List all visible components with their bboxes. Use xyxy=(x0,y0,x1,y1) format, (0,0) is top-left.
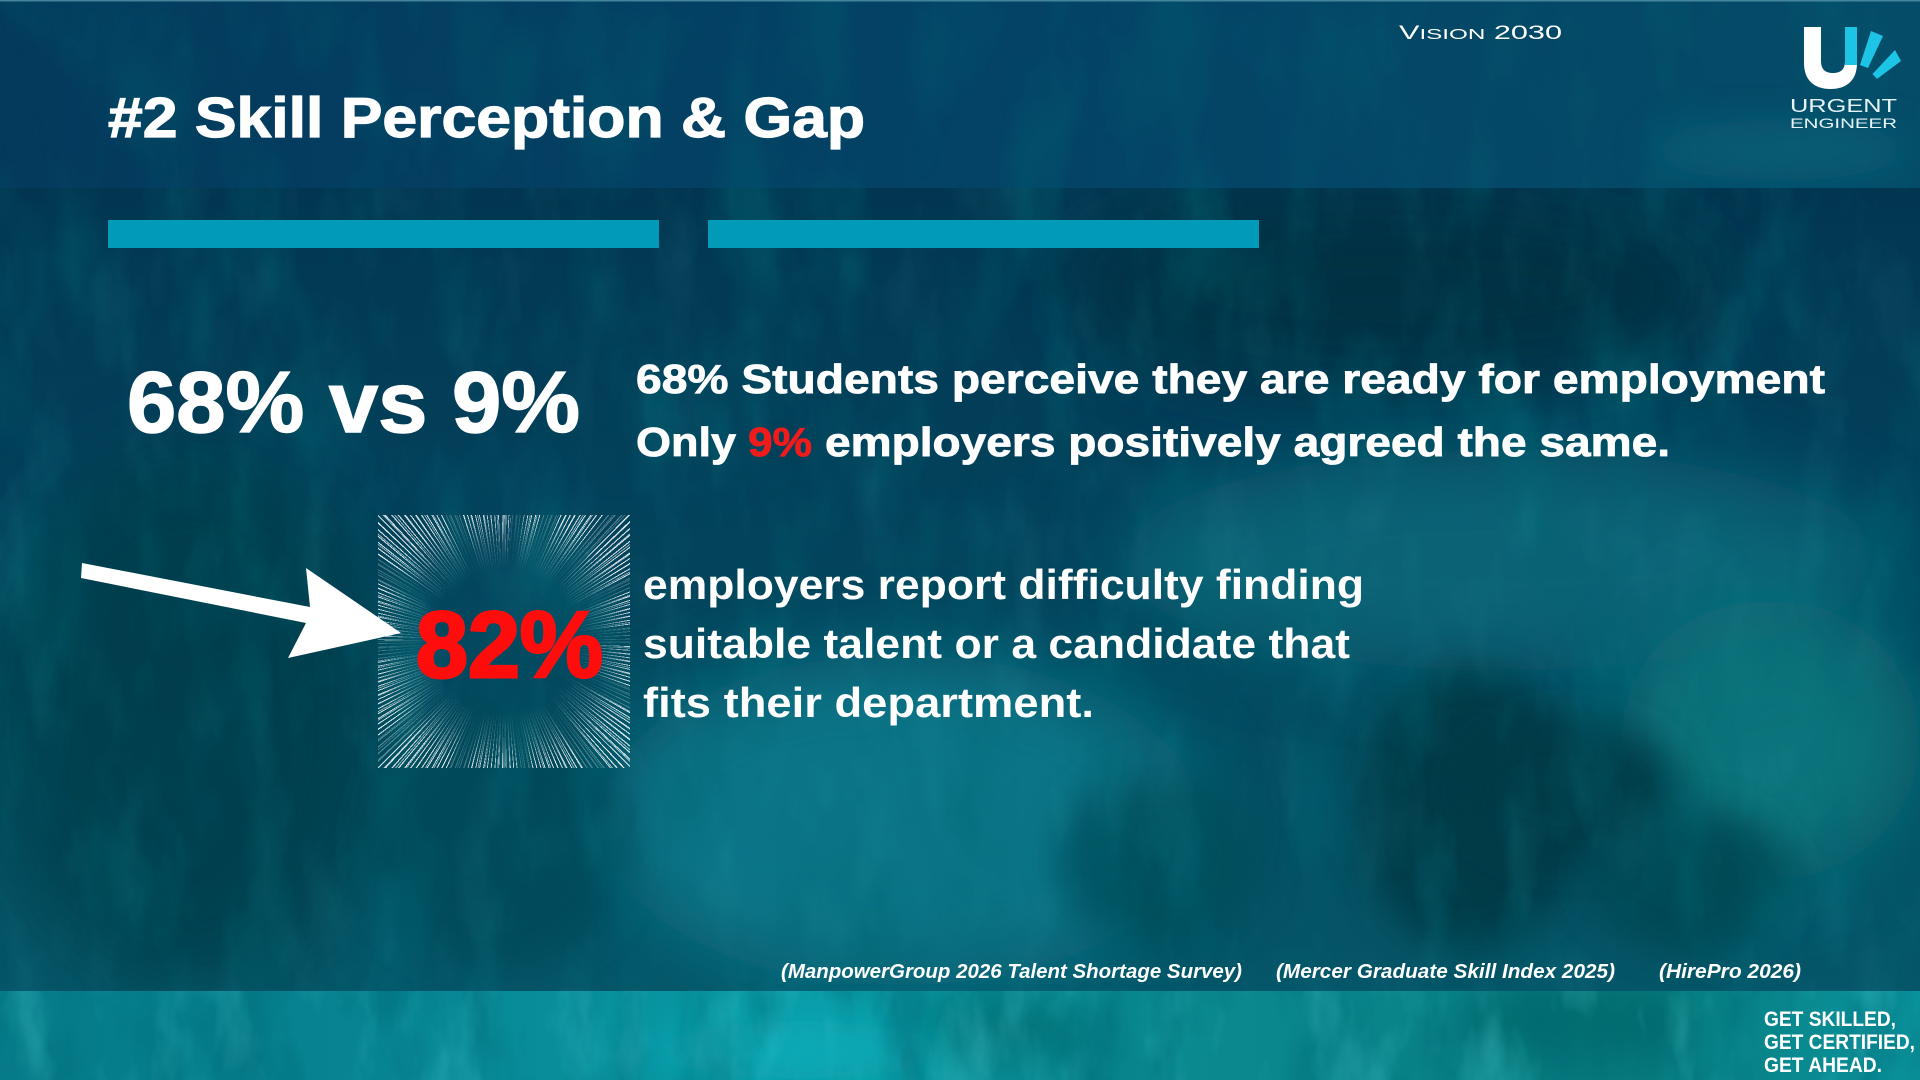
background: middle dark zone xyxy=(0,188,1920,991)
statement: employer agreement: Only xyxy=(636,419,736,465)
body text: 82% description xyxy=(643,561,1364,726)
tagline: GET AHEAD. xyxy=(1764,1054,1882,1077)
tagline: GET SKILLED, xyxy=(1764,1008,1896,1031)
source citations: (HirePro 2026) xyxy=(1659,961,1801,983)
body text: 82% description: employers report difficulty finding xyxy=(643,561,1364,608)
logo: urgent engineer xyxy=(1790,27,1901,131)
stat: 82%: 82% xyxy=(416,592,603,697)
arrow pointing to 82% xyxy=(81,563,401,658)
source citations: (Mercer Graduate Skill Index 2025) xyxy=(1276,961,1615,983)
logo: urgent engineer: ENGINEER xyxy=(1790,115,1897,131)
logo: urgent engineer: URGENT xyxy=(1790,96,1897,116)
top edge line xyxy=(0,0,1920,2)
source citations: (ManpowerGroup 2026 Talent Shortage Survey) xyxy=(781,961,1242,983)
headline stat: 68% vs 9%: 68% vs 9% xyxy=(127,355,580,451)
accent bar right xyxy=(708,220,1259,248)
title: #2 Skill Perception & Gap xyxy=(108,86,865,150)
tagline xyxy=(1764,1008,1915,1077)
body text: 82% description: fits their department. xyxy=(643,679,1094,726)
body text: 82% description: suitable talent or a candidate that xyxy=(643,620,1350,667)
statement: employer agreement: employers positively agreed the same. xyxy=(825,419,1670,465)
statement: employer agreement: 9% xyxy=(748,419,812,465)
section tag: vision 2030: V ISION 2030 xyxy=(1399,23,1562,44)
burst rays behind 82% xyxy=(378,515,630,768)
accent bar left xyxy=(108,220,659,248)
statement: student perception: 68% Students perceive they are ready for employment xyxy=(636,356,1825,402)
background: top band xyxy=(367,2,1920,188)
source citations xyxy=(781,961,1801,983)
background: bottom band xyxy=(0,991,1920,1080)
